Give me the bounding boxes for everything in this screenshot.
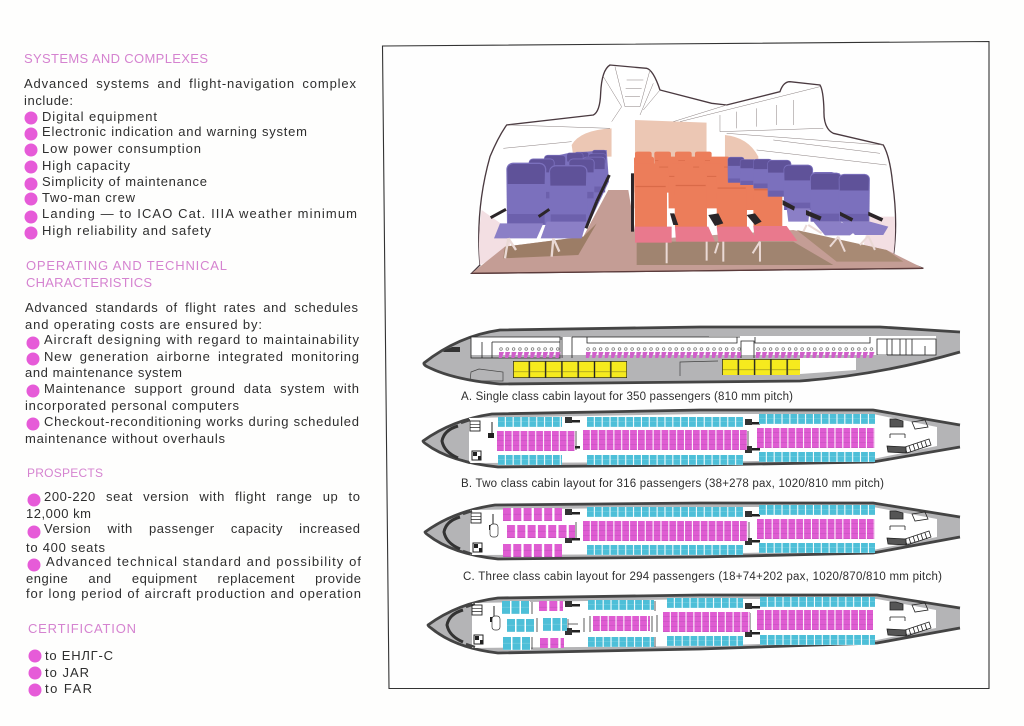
heading: systems and complexes: SYSTEMS AND COMPLEXES xyxy=(24,51,208,66)
heading: operating and technical characteristics xyxy=(26,258,227,290)
text block: operating intro: Advanced standards of flight rates and schedules xyxy=(25,300,358,315)
panel: prospects xyxy=(26,466,361,601)
diagram: side view fuselage xyxy=(424,327,960,384)
bullet list: operating standards: Checkout-reconditioning works during scheduled xyxy=(44,414,359,429)
bullet list: system features: Digital equipment xyxy=(42,109,157,124)
bullet list: system features: Electronic indication and warning system xyxy=(42,124,307,139)
cargo containers forward xyxy=(513,361,627,378)
heading: prospects: PROSPECTS xyxy=(27,466,103,480)
bullet list: prospects: 200-220 seat version with flight range up to xyxy=(44,489,360,504)
heading: operating and technical characteristics: OPERATING AND TECHNICAL xyxy=(26,258,227,273)
caption: layout A: A. Single class cabin layout for 350 passengers (810 mm pitch) xyxy=(461,391,793,403)
bullet list: prospects: to 400 seats xyxy=(26,540,106,555)
bullet list: system features: Landing — to ICAO Cat. IIIA weather minimum xyxy=(42,206,357,221)
bullet list: system features: Simplicity of maintenance xyxy=(42,174,207,189)
diagram: layout B two class xyxy=(423,410,960,467)
text block: operating intro xyxy=(25,300,358,332)
bullet list: operating standards: Maintenance support ground data system with xyxy=(44,381,359,396)
bullet list: operating standards: New generation airborne integrated monitoring xyxy=(44,349,359,364)
text block: systems intro xyxy=(24,76,356,108)
bullet list: prospects: engine and equipment replacement provide xyxy=(26,571,361,586)
bullet list: system features xyxy=(24,109,357,240)
text block: systems intro: include: xyxy=(24,93,73,108)
caption: layout C: C. Three class cabin layout for 294 passengers (18+74+202 pax, 1020/870/810 mm pitch) xyxy=(463,571,942,583)
text block: operating intro: and operating costs are ensured by: xyxy=(25,317,262,332)
heading: certification: CERTIFICATION xyxy=(28,621,136,636)
panel: operating and technical characteristics xyxy=(25,258,360,446)
bullet list: system features: Low power consumption xyxy=(42,141,201,156)
bullet list: certification: to JAR xyxy=(45,665,89,680)
caption: layout B: B. Two class cabin layout for 316 passengers (38+278 pax, 1020/810 mm pitch) xyxy=(461,478,884,490)
bullet list: system features: High capacity xyxy=(42,158,130,173)
bullet list: certification xyxy=(28,648,113,696)
cargo containers aft xyxy=(722,359,800,375)
panel: certification xyxy=(28,621,136,696)
diagram: layout C three class xyxy=(425,503,960,559)
bullet list: prospects: for long period of aircraft production and operation xyxy=(26,586,361,601)
diagram: layout D mixed class xyxy=(428,595,960,653)
bullet list: certification: to FAR xyxy=(45,681,92,696)
bullet list: prospects xyxy=(26,489,361,601)
bullet list: prospects: 12,000 km xyxy=(26,506,91,521)
panel: cabin frame xyxy=(382,42,989,688)
bullet list: certification: to ЕНЛГ-С xyxy=(45,648,113,663)
text block: systems intro: Advanced systems and flight-navigation complex xyxy=(24,76,356,91)
bullet list: system features: Two-man crew xyxy=(42,190,136,205)
illustration: passenger cabin interior xyxy=(472,65,923,273)
bullet list: operating standards: Aircraft designing with regard to maintainability xyxy=(44,332,360,347)
bullet list: operating standards: incorporated personal computers xyxy=(25,398,240,413)
bullet list: prospects: Version with passenger capacity increased xyxy=(44,521,360,536)
panel: systems and complexes xyxy=(24,51,357,240)
bullet list: system features: High reliability and safety xyxy=(42,223,212,238)
bullet list: operating standards xyxy=(25,332,360,446)
bullet list: operating standards: maintenance without overhauls xyxy=(25,431,226,446)
bullet list: prospects: Advanced technical standard and possibility of xyxy=(46,554,361,569)
bullet list: operating standards: and maintenance system xyxy=(25,365,182,380)
heading: operating and technical characteristics: CHARACTERISTICS xyxy=(26,275,152,290)
